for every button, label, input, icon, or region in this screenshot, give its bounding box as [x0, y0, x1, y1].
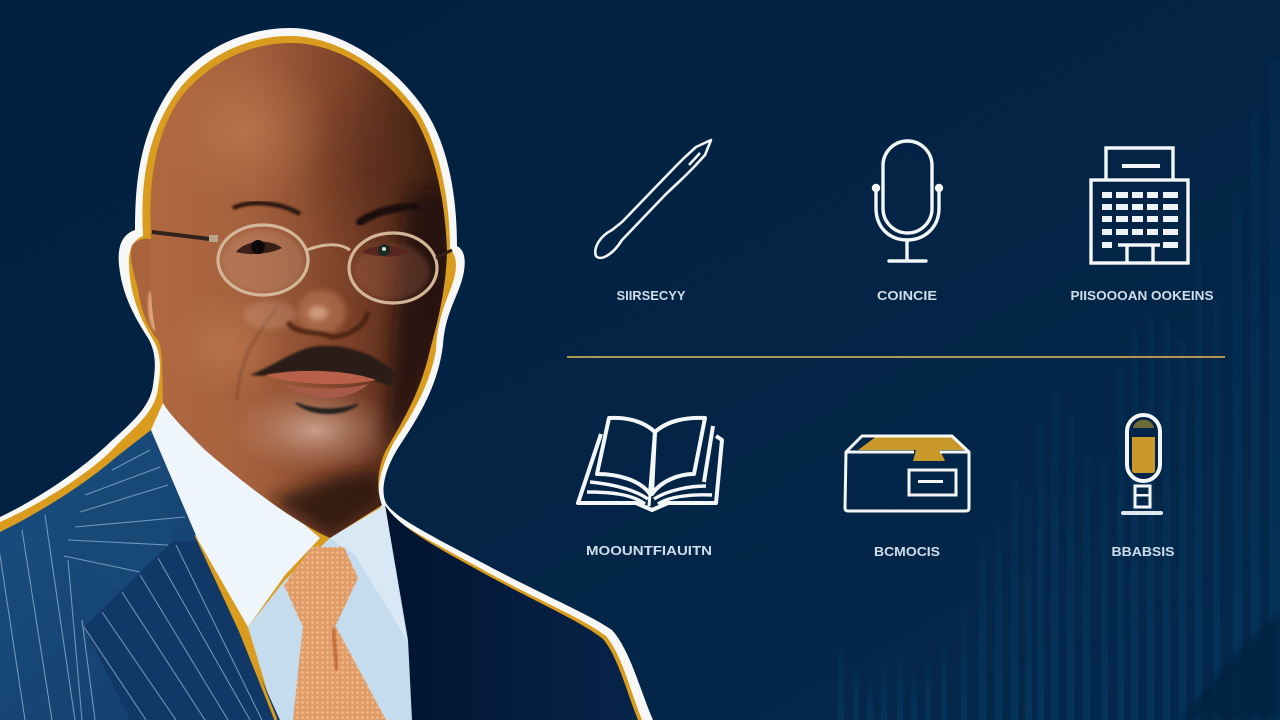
label: box: BCMOCIS — [874, 544, 940, 559]
right collar — [330, 505, 407, 640]
ear — [131, 239, 168, 345]
icon: pen — [595, 140, 711, 258]
icon: gold microphone — [1121, 415, 1163, 515]
tie — [284, 547, 386, 720]
box body — [845, 436, 969, 511]
right jacket — [385, 505, 638, 720]
label: gold microphone: BBABSIS — [1112, 544, 1175, 559]
capsule top — [1133, 420, 1154, 428]
glasses — [152, 225, 452, 303]
box label — [909, 470, 956, 495]
base — [1121, 511, 1163, 515]
dark diagonal corner — [1180, 610, 1280, 720]
goatee — [296, 403, 358, 413]
capsule fill — [1132, 437, 1155, 473]
background bar chart decoration — [838, 60, 1280, 720]
label: pen: SIIRSECYY — [616, 288, 686, 303]
head — [150, 43, 447, 538]
tie blade — [293, 625, 386, 720]
portrait — [0, 28, 653, 720]
face shading — [200, 92, 447, 538]
stem — [1135, 486, 1150, 507]
eyes — [236, 240, 410, 256]
shirt — [248, 505, 412, 720]
lapel upper — [63, 437, 172, 590]
mustache — [250, 346, 396, 386]
lapel lower — [84, 540, 276, 720]
icon: box — [845, 436, 969, 511]
icon: building — [1091, 148, 1188, 263]
white collar — [151, 403, 320, 627]
white outline — [0, 28, 653, 720]
icon: open book — [578, 418, 722, 510]
icon: microphone — [874, 141, 942, 261]
tie knot — [284, 547, 358, 625]
left suit — [0, 430, 280, 720]
pinstripes — [0, 450, 262, 720]
gold lapel edge — [196, 535, 276, 720]
divider line — [567, 356, 1225, 358]
nose base — [288, 312, 368, 337]
gold outline — [0, 36, 642, 720]
box lid — [858, 436, 968, 461]
eyebrows — [233, 203, 300, 214]
label: building: PIISOOOAN OOKEINS — [1070, 288, 1214, 303]
label: open book: MOOUNTFIAUITN — [586, 543, 712, 558]
lips — [266, 371, 376, 384]
label: microphone: COINCIE — [877, 288, 937, 303]
